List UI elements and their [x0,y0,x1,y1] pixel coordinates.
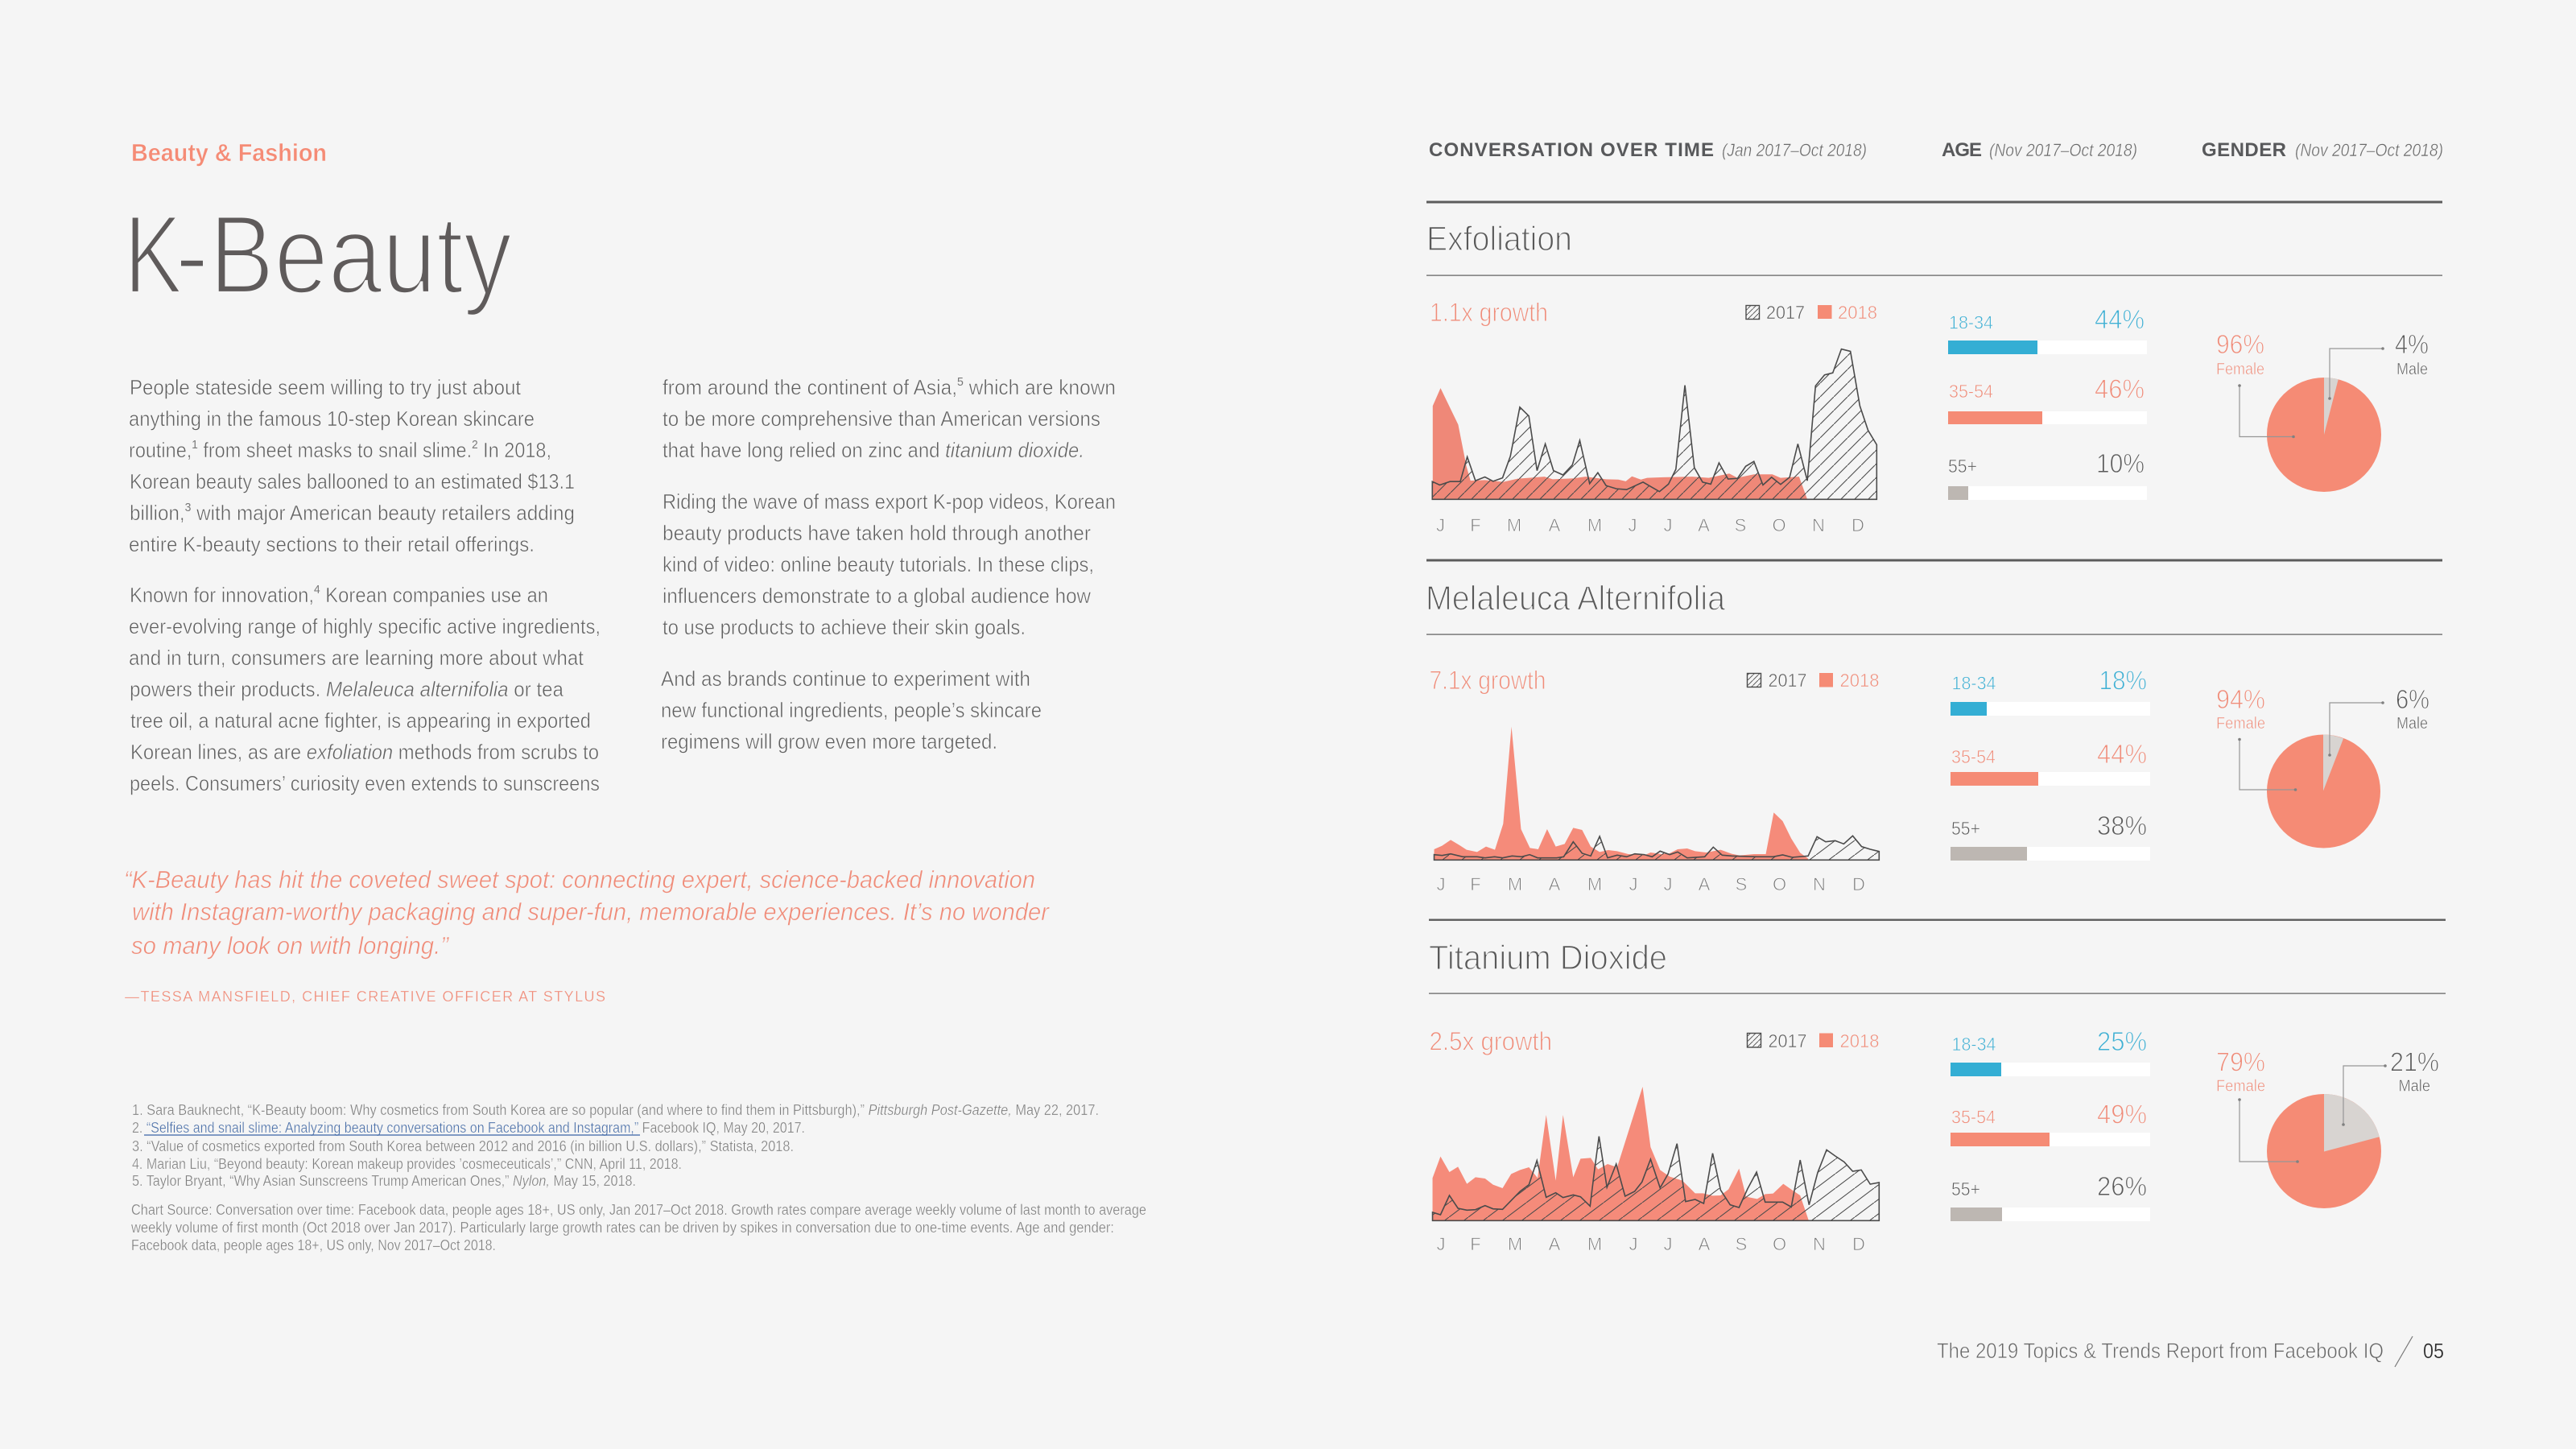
month labels: A [1699,874,1711,894]
footnotes: 2. “Selfies and snail slime: Analyzing beauty conversations on Facebook and Instagram,” Facebook IQ, May 20, 2017. [132,1120,805,1136]
area chart [1429,727,1880,863]
header: gender: GENDER [2202,139,2286,161]
paragraph 2: peels. Consumers’ curiosity even extends to sunscreens [130,771,600,795]
age bars: 44% [2097,739,2147,769]
panel: Melaleuca Alternifolia [1426,580,2429,894]
paragraph 1: with major American beauty retailers adding [191,501,575,525]
month labels: F [1470,515,1481,535]
footer [1937,1336,2444,1367]
paragraph 1: Korean beauty sales ballooned to an estimated $13.1 [130,469,575,493]
gender pie: Male [2396,361,2428,378]
month labels: M [1508,874,1522,894]
paragraph 1: anything in the famous 10-step Korean skincare [129,407,535,431]
title: K [124,192,183,317]
page number: 05 [2423,1339,2444,1363]
month labels: M [1587,515,1602,535]
month labels: N [1813,874,1826,894]
age bars: 18-34 [1951,673,1996,694]
age bars: 55+ [1951,818,1980,839]
age bars: 35-54 [1951,1106,1996,1127]
age bars: 46% [2095,374,2145,404]
gender pie: 21% [2390,1046,2439,1077]
paragraph 4: influencers demonstrate to a global audience how [663,584,1091,608]
age bars: 26% [2097,1171,2147,1201]
legend [1746,302,1877,323]
month labels: J [1663,1234,1673,1254]
month labels: M [1508,1234,1522,1254]
footnotes: 1. Sara Bauknecht, “K-Beauty boom: Why cosmetics from South Korea are so popular (and where to find them in Pittsburgh),” Pittsburgh Post-Gazette, May 22, 2017. [132,1102,1099,1118]
month labels: A [1699,1234,1711,1254]
month labels: S [1736,1234,1747,1254]
month labels [1436,515,1864,535]
month labels: S [1736,874,1747,894]
pull quote: “K-Beauty has hit the coveted sweet spot: connecting expert, science-backed innovation [124,865,1035,894]
header: age: AGE [1942,139,1982,161]
age bars: 38% [2097,811,2147,840]
month labels [1436,874,1865,894]
paragraph 2: Known for innovation, [130,583,331,607]
heading: Titanium Dioxide [1429,939,1667,977]
month labels: O [1773,874,1786,894]
age bars: 44% [2095,304,2145,334]
body text column 1 [129,375,601,795]
paragraph 1: 2 [472,438,478,452]
header: age: (Nov 2017–Oct 2018) [1989,140,2137,160]
month labels: O [1772,515,1786,535]
paragraph 2: and in turn, consumers are learning more about what [129,646,584,670]
category label: Beauty & Fashion [131,138,327,167]
legend [1747,1030,1879,1051]
gender pie: 6% [2396,684,2429,714]
paragraph 1: In 2018, [478,438,551,462]
header: conversation over time: (Jan 2017–Oct 2018) [1722,140,1867,160]
panel: Titanium Dioxide [1429,939,2439,1254]
footnotes [132,1102,1099,1189]
pull quote: with Instagram-worthy packaging and super-fun, memorable experiences. It’s no wonder [132,898,1051,926]
gender pie: 94% [2216,684,2265,714]
month labels: D [1852,515,1864,535]
paragraph 3 [663,375,1116,462]
month labels: J [1629,874,1637,894]
report name: The 2019 Topics & Trends Report from Facebook IQ [1937,1339,2384,1363]
header: gender [2202,139,2443,161]
month labels: F [1470,1234,1481,1254]
age bars: 55+ [1951,1179,1980,1199]
footnotes: 4. Marian Liu, “Beyond beauty: Korean makeup provides ’cosmeceuticals’,” CNN, April 11, 2018. [132,1156,682,1172]
legend: 2018 [1840,1030,1879,1051]
month labels: N [1813,1234,1826,1254]
quote attribution: —TESSA MANSFIELD, CHIEF CREATIVE OFFICER AT STYLUS [125,989,605,1005]
paragraph 5: And as brands continue to experiment with [661,667,1030,691]
heading: Melaleuca Alternifolia [1426,580,1725,618]
paragraph 5: regimens will grow even more targeted. [661,729,997,753]
month labels: A [1549,874,1561,894]
age bars: 35-54 [1949,381,1993,402]
chart source note: Facebook data, people ages 18+, US only, Nov 2017–Oct 2018. [131,1237,496,1253]
age bars: 49% [2097,1100,2147,1129]
legend: 2017 [1768,670,1806,691]
title: - [175,192,209,317]
age bars: 18-34 [1949,312,1993,333]
age bars [1948,304,2147,500]
paragraph 1: entire K-beauty sections to their retail offerings. [129,532,535,556]
paragraph 1: 1 [192,438,198,452]
paragraph 2 [129,583,601,795]
month labels [1436,1234,1865,1254]
month labels: S [1735,515,1746,535]
gender pie: 4% [2395,329,2429,359]
paragraph 4 [663,489,1116,639]
gender pie: Female [2216,715,2265,733]
paragraph 1: People stateside seem willing to try just about [130,375,522,399]
paragraph 2: ever-evolving range of highly specific active ingredients, [129,614,601,638]
chart source note: weekly volume of first month (Oct 2018 over Jan 2017). Particularly large growth rates can be driven by spikes in conversation due to one-time events. Age and gender: [130,1220,1114,1236]
month labels: F [1470,874,1481,894]
gender pie: 96% [2216,329,2264,359]
legend: 2017 [1766,302,1805,323]
pull quote: so many look on with longing.” [131,931,450,960]
paragraph 2: Korean lines, as are exfoliation methods from scrubs to [130,740,599,764]
gender pie: Male [2399,1077,2430,1095]
month labels: D [1852,874,1865,894]
gender pie [2216,1046,2439,1208]
gender pie: Female [2216,361,2264,378]
age bars [1951,665,2150,861]
month labels: A [1549,1234,1561,1254]
paragraph 3: which are known [964,375,1116,399]
header: gender: (Nov 2017–Oct 2018) [2295,140,2443,160]
legend [1747,670,1879,691]
paragraph 1: billion, [130,501,189,525]
paragraph 4: beauty products have taken hold through another [663,521,1091,545]
pull quote [124,865,1051,960]
paragraph 4: kind of video: online beauty tutorials. In these clips, [663,552,1094,576]
gender pie: Male [2396,715,2428,733]
paragraph 4: Riding the wave of mass export K-pop videos, Korean [663,489,1116,514]
growth figure: 1.1x growth [1430,298,1548,327]
footnotes: 5. Taylor Bryant, “Why Asian Sunscreens Trump American Ones,” Nylon, May 15, 2018. [132,1173,636,1189]
chart source note: Chart Source: Conversation over time: Facebook data, people ages 18+, US only, Jan 2017–Oct 2018. Growth rates compare average weekly volume of last month to average [131,1202,1146,1218]
month labels: D [1852,1234,1865,1254]
paragraph 2: Korean companies use an [320,583,548,607]
header: conversation over time [1429,139,1867,161]
age bars: 18-34 [1951,1034,1996,1055]
paragraph 2: powers their products. Melaleuca alternifolia or tea [130,677,564,701]
month labels: J [1436,1234,1446,1254]
age bars: 25% [2097,1026,2147,1056]
growth figure: 7.1x growth [1430,666,1546,695]
paragraph 2: tree oil, a natural acne fighter, is appearing in exported [130,708,591,733]
paragraph 3: 5 [957,375,964,389]
age bars: 18% [2099,665,2147,696]
paragraph 1: routine, [129,438,199,462]
month labels: A [1698,515,1710,535]
age bars: 10% [2096,448,2145,478]
paragraph 3: from around the continent of Asia, [663,375,976,399]
month labels: J [1663,515,1673,535]
age bars: 55+ [1948,456,1977,477]
month labels: O [1773,1234,1786,1254]
month labels: M [1587,1234,1602,1254]
body text column 2 [661,375,1116,753]
header: age [1942,139,2137,161]
gender pie: 79% [2216,1046,2265,1077]
area chart [1429,1087,1880,1224]
gender pie [2216,684,2429,848]
age bars: 35-54 [1951,746,1996,767]
footnotes: 3. “Value of cosmetics exported from South Korea between 2012 and 2016 (in billion U.S. dollars),” Statista, 2018. [132,1138,794,1154]
chart source note [130,1202,1146,1253]
month labels: M [1587,874,1602,894]
legend: 2018 [1838,302,1877,323]
month labels: J [1629,1234,1637,1254]
heading: Exfoliation [1426,220,1572,258]
paragraph 5 [661,667,1042,753]
gender pie: Female [2216,1077,2265,1095]
title: Beauty [209,192,512,317]
paragraph 2: 4 [314,583,320,597]
column headers [1429,139,2443,161]
legend: 2018 [1840,670,1879,691]
panel: Exfoliation [1426,220,2429,535]
paragraph 5: new functional ingredients, people’s skincare [661,698,1042,722]
gender pie [2216,329,2429,492]
header: conversation over time: CONVERSATION OVER TIME [1429,139,1714,161]
paragraph 1: 3 [185,501,191,514]
area chart [1431,348,1877,501]
month labels: A [1549,515,1561,535]
paragraph 3: to be more comprehensive than American versions [663,407,1100,431]
section rules [1426,201,2446,994]
age bars [1951,1026,2150,1221]
month labels: J [1436,874,1446,894]
month labels: N [1812,515,1825,535]
paragraph 4: to use products to achieve their skin goals. [663,615,1026,639]
growth figure: 2.5x growth [1430,1027,1552,1056]
paragraph 1 [129,375,575,556]
paragraph 3: that have long relied on zinc and titanium dioxide. [663,438,1084,462]
month labels: J [1663,874,1673,894]
month labels: M [1507,515,1521,535]
paragraph 1: from sheet masks to snail slime. [198,438,472,462]
legend: 2017 [1768,1030,1806,1051]
month labels: J [1628,515,1637,535]
month labels: J [1436,515,1445,535]
